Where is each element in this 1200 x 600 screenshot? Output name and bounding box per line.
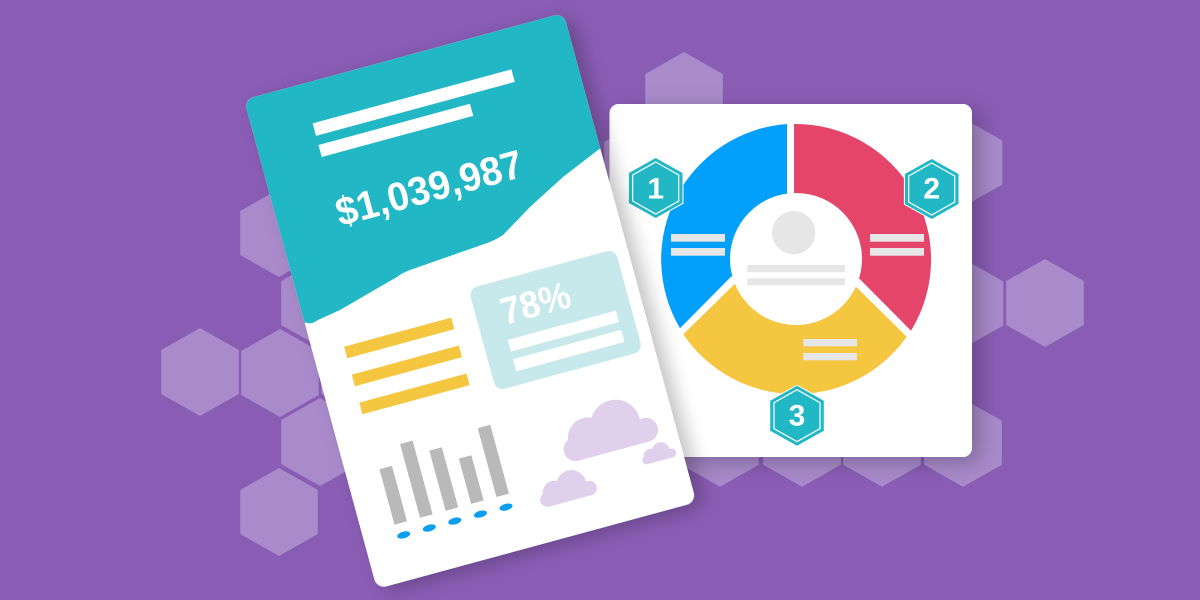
badge 2: 2 bbox=[923, 172, 940, 206]
headline amount: $1,039,987 bbox=[331, 142, 528, 235]
badge 2 bbox=[904, 158, 960, 220]
bar chart dots bbox=[396, 502, 513, 540]
badge 1 bbox=[628, 157, 684, 219]
card background bbox=[610, 104, 972, 457]
background hexagon pattern bbox=[161, 52, 1084, 556]
segment 2 text lines bbox=[870, 234, 924, 256]
yellow text lines bbox=[344, 318, 470, 414]
segment 3 text lines bbox=[803, 339, 857, 360]
badge 3 bbox=[769, 385, 825, 447]
stat box background bbox=[468, 249, 643, 391]
stat value: 78% bbox=[496, 274, 575, 334]
stat lines bbox=[508, 311, 624, 371]
icon: small cloud bbox=[639, 439, 677, 465]
segment 1 text lines bbox=[671, 234, 725, 256]
header lines bbox=[313, 69, 521, 157]
panel: donut chart card bbox=[610, 104, 972, 457]
segment 1: blue bbox=[661, 124, 787, 328]
centre avatar circle bbox=[772, 211, 815, 254]
badge 1: 1 bbox=[647, 172, 664, 206]
donut centre bbox=[730, 193, 862, 325]
teal header with wave bbox=[246, 15, 600, 324]
donut chart bbox=[661, 124, 931, 394]
icon: medium cloud bbox=[534, 464, 598, 508]
panel: tilted report card bbox=[230, 0, 696, 589]
bar chart bbox=[374, 420, 509, 525]
badge 3: 3 bbox=[789, 400, 805, 433]
segment 3: yellow bbox=[683, 259, 907, 394]
stat box bbox=[468, 249, 643, 391]
segment 2: red bbox=[794, 124, 931, 331]
card background bbox=[244, 13, 696, 589]
card contents bbox=[285, 55, 674, 540]
centre text lines bbox=[747, 265, 845, 285]
icon: large cloud bbox=[554, 390, 661, 464]
